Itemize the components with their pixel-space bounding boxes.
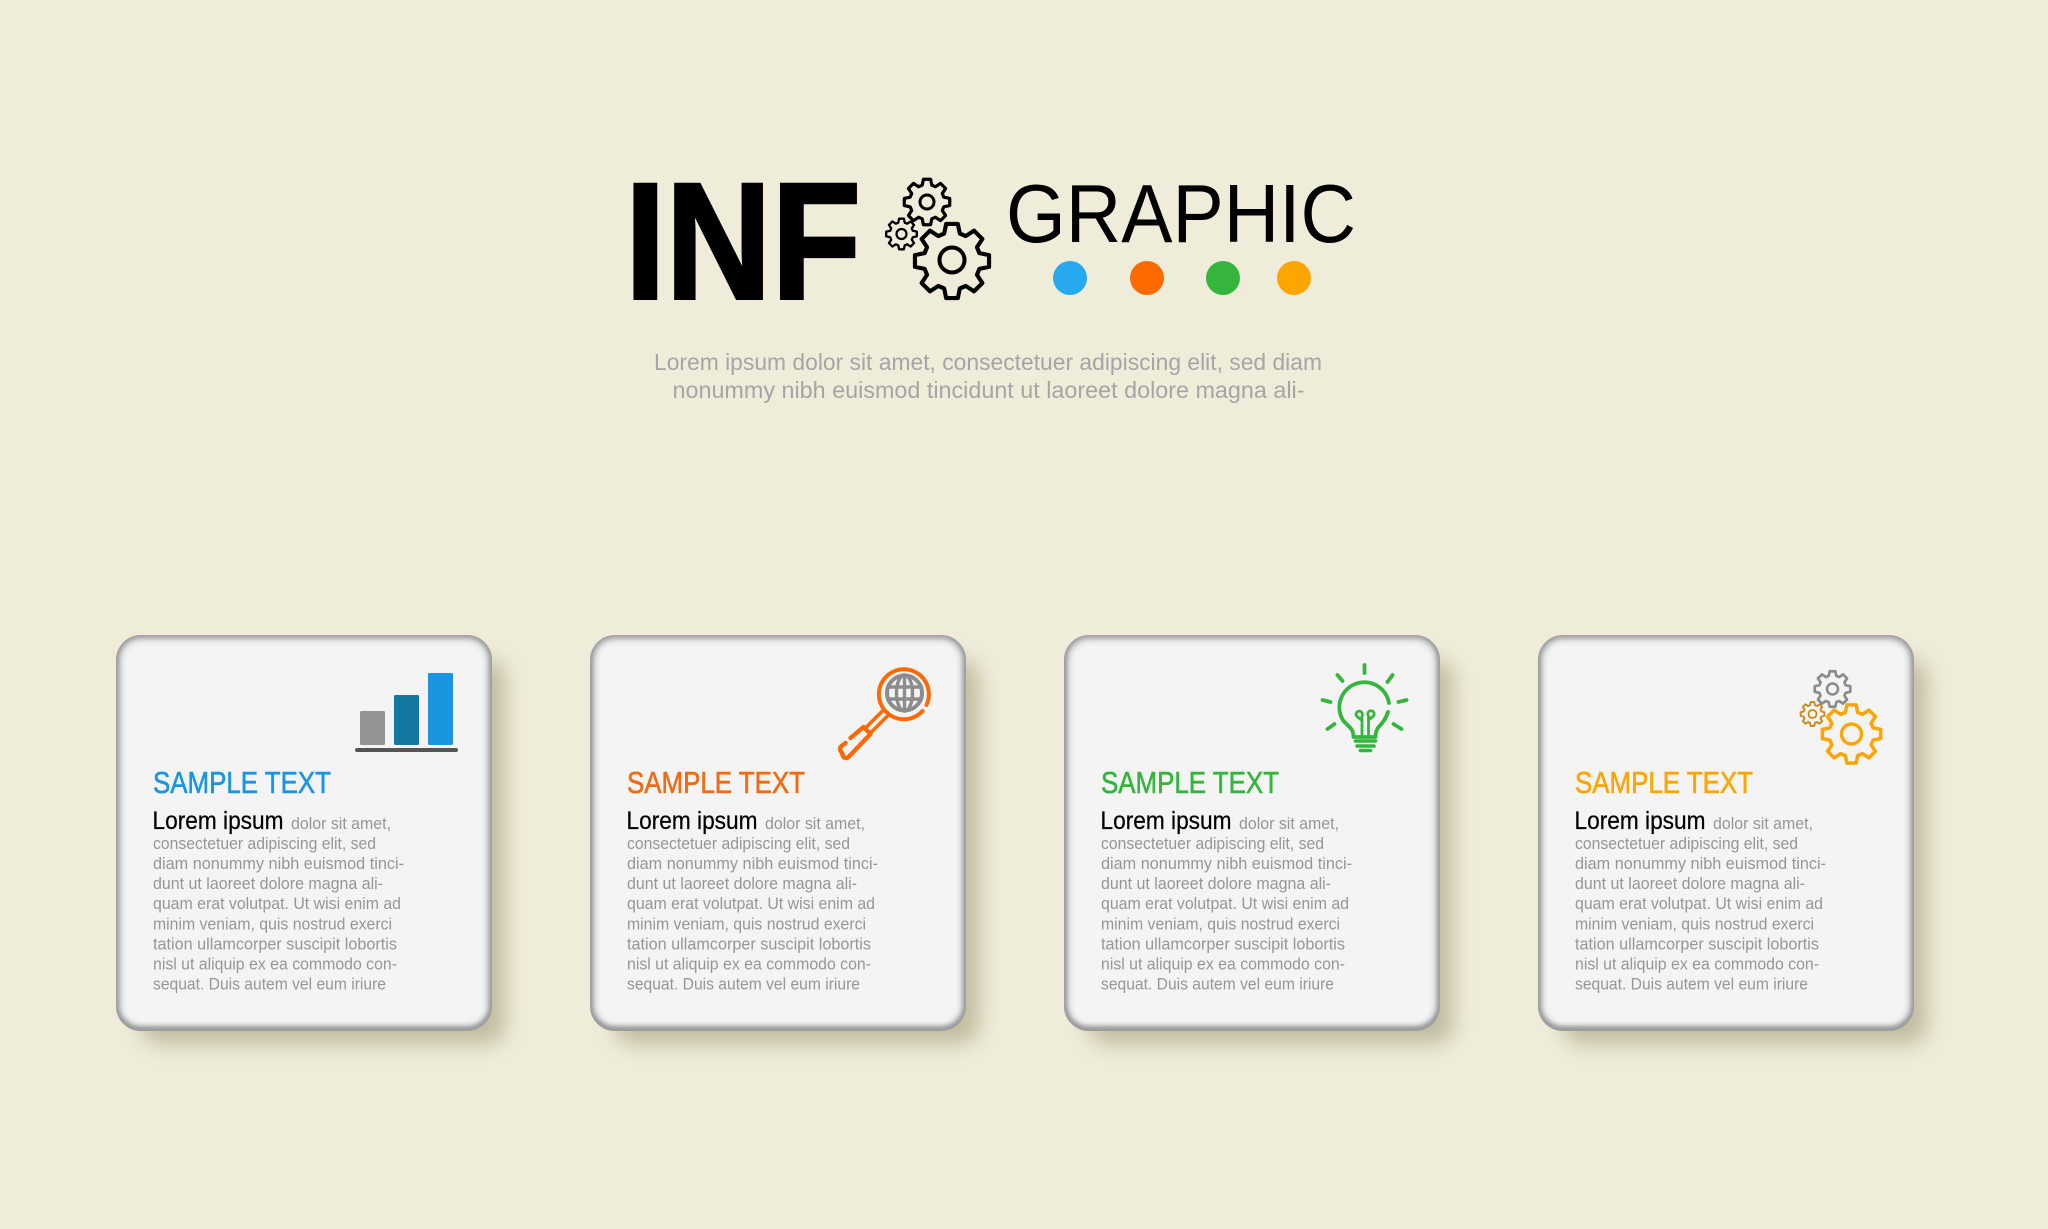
text block: dolor sit amet, (1712, 814, 1812, 833)
subtitle: Lorem ipsum dolor sit amet, consectetuer adipiscing elit, sed diam (654, 349, 1322, 375)
heading: SAMPLE TEXT (153, 765, 331, 800)
text block: consectetuer adipiscing elit, sed (1100, 834, 1324, 853)
text block: dunt ut laoreet dolore magna ali- (153, 874, 383, 893)
heading: SAMPLE TEXT (1100, 765, 1279, 800)
text block: dolor sit amet, (764, 814, 864, 833)
icon: light bulb (1322, 665, 1406, 750)
text block: minim veniam, quis nostrud exerci (626, 914, 866, 934)
text block (626, 807, 878, 994)
text block (152, 807, 404, 994)
header: title and subtitle (625, 150, 1356, 403)
text block: tation ullamcorper suscipit lobortis (1100, 934, 1344, 954)
text block: nisl ut aliquip ex ea commodo con- (1100, 954, 1344, 974)
subtitle (654, 349, 1322, 403)
text block: sequat. Duis autem vel eum iriure (1100, 974, 1334, 994)
text block: dunt ut laoreet dolore magna ali- (626, 874, 856, 893)
icon: magnifier with globe (840, 669, 928, 758)
text block: diam nonummy nibh euismod tinci- (626, 854, 878, 873)
text block: sequat. Duis autem vel eum iriure (153, 974, 386, 994)
icon: gears (1800, 671, 1880, 763)
text block: tation ullamcorper suscipit lobortis (153, 934, 397, 954)
text block: consectetuer adipiscing elit, sed (626, 834, 850, 853)
text block: dolor sit amet, (291, 814, 391, 833)
text block: dolor sit amet, (1238, 814, 1338, 833)
text block: quam erat volutpat. Ut wisi enim ad (1100, 894, 1348, 913)
text block: nisl ut aliquip ex ea commodo con- (153, 954, 397, 974)
text block: dunt ut laoreet dolore magna ali- (1574, 874, 1804, 893)
title word INF: INF (625, 150, 861, 334)
text block: diam nonummy nibh euismod tinci- (153, 854, 404, 873)
subtitle: nonummy nibh euismod tincidunt ut laoreet dolore magna ali- (672, 377, 1304, 403)
text block: minim veniam, quis nostrud exerci (153, 914, 392, 934)
text block: diam nonummy nibh euismod tinci- (1574, 854, 1826, 873)
text block (1100, 807, 1352, 994)
text block: consectetuer adipiscing elit, sed (1574, 834, 1798, 853)
panel: card 3 green (1064, 635, 1440, 1031)
panel: card 2 orange (590, 635, 966, 1031)
text block: Lorem ipsum (152, 807, 284, 835)
text block: Lorem ipsum (1574, 807, 1705, 835)
panel: card 4 amber (1538, 635, 1914, 1031)
text block: quam erat volutpat. Ut wisi enim ad (1574, 894, 1822, 913)
text block: consectetuer adipiscing elit, sed (153, 834, 376, 853)
text block (1574, 807, 1826, 994)
text block: Lorem ipsum (1100, 807, 1231, 835)
text block: sequat. Duis autem vel eum iriure (1574, 974, 1808, 994)
text block: quam erat volutpat. Ut wisi enim ad (153, 894, 401, 913)
text block: tation ullamcorper suscipit lobortis (626, 934, 870, 954)
text block: minim veniam, quis nostrud exerci (1574, 914, 1814, 934)
text block: tation ullamcorper suscipit lobortis (1574, 934, 1818, 954)
text block: Lorem ipsum (626, 807, 757, 835)
panel: card 1 blue (116, 635, 492, 1031)
text block: nisl ut aliquip ex ea commodo con- (1574, 954, 1818, 974)
heading: SAMPLE TEXT (626, 765, 805, 800)
text block: nisl ut aliquip ex ea commodo con- (626, 954, 870, 974)
text block: sequat. Duis autem vel eum iriure (626, 974, 860, 994)
icon: bar chart (355, 673, 458, 752)
icon: gears (886, 179, 989, 298)
colored dots (1053, 261, 1311, 295)
heading: SAMPLE TEXT (1574, 765, 1753, 800)
text block: diam nonummy nibh euismod tinci- (1100, 854, 1352, 873)
title word GRAPHIC: GRAPHIC (1006, 167, 1356, 260)
text block: dunt ut laoreet dolore magna ali- (1100, 874, 1330, 893)
text block: minim veniam, quis nostrud exerci (1100, 914, 1340, 934)
text block: quam erat volutpat. Ut wisi enim ad (626, 894, 874, 913)
